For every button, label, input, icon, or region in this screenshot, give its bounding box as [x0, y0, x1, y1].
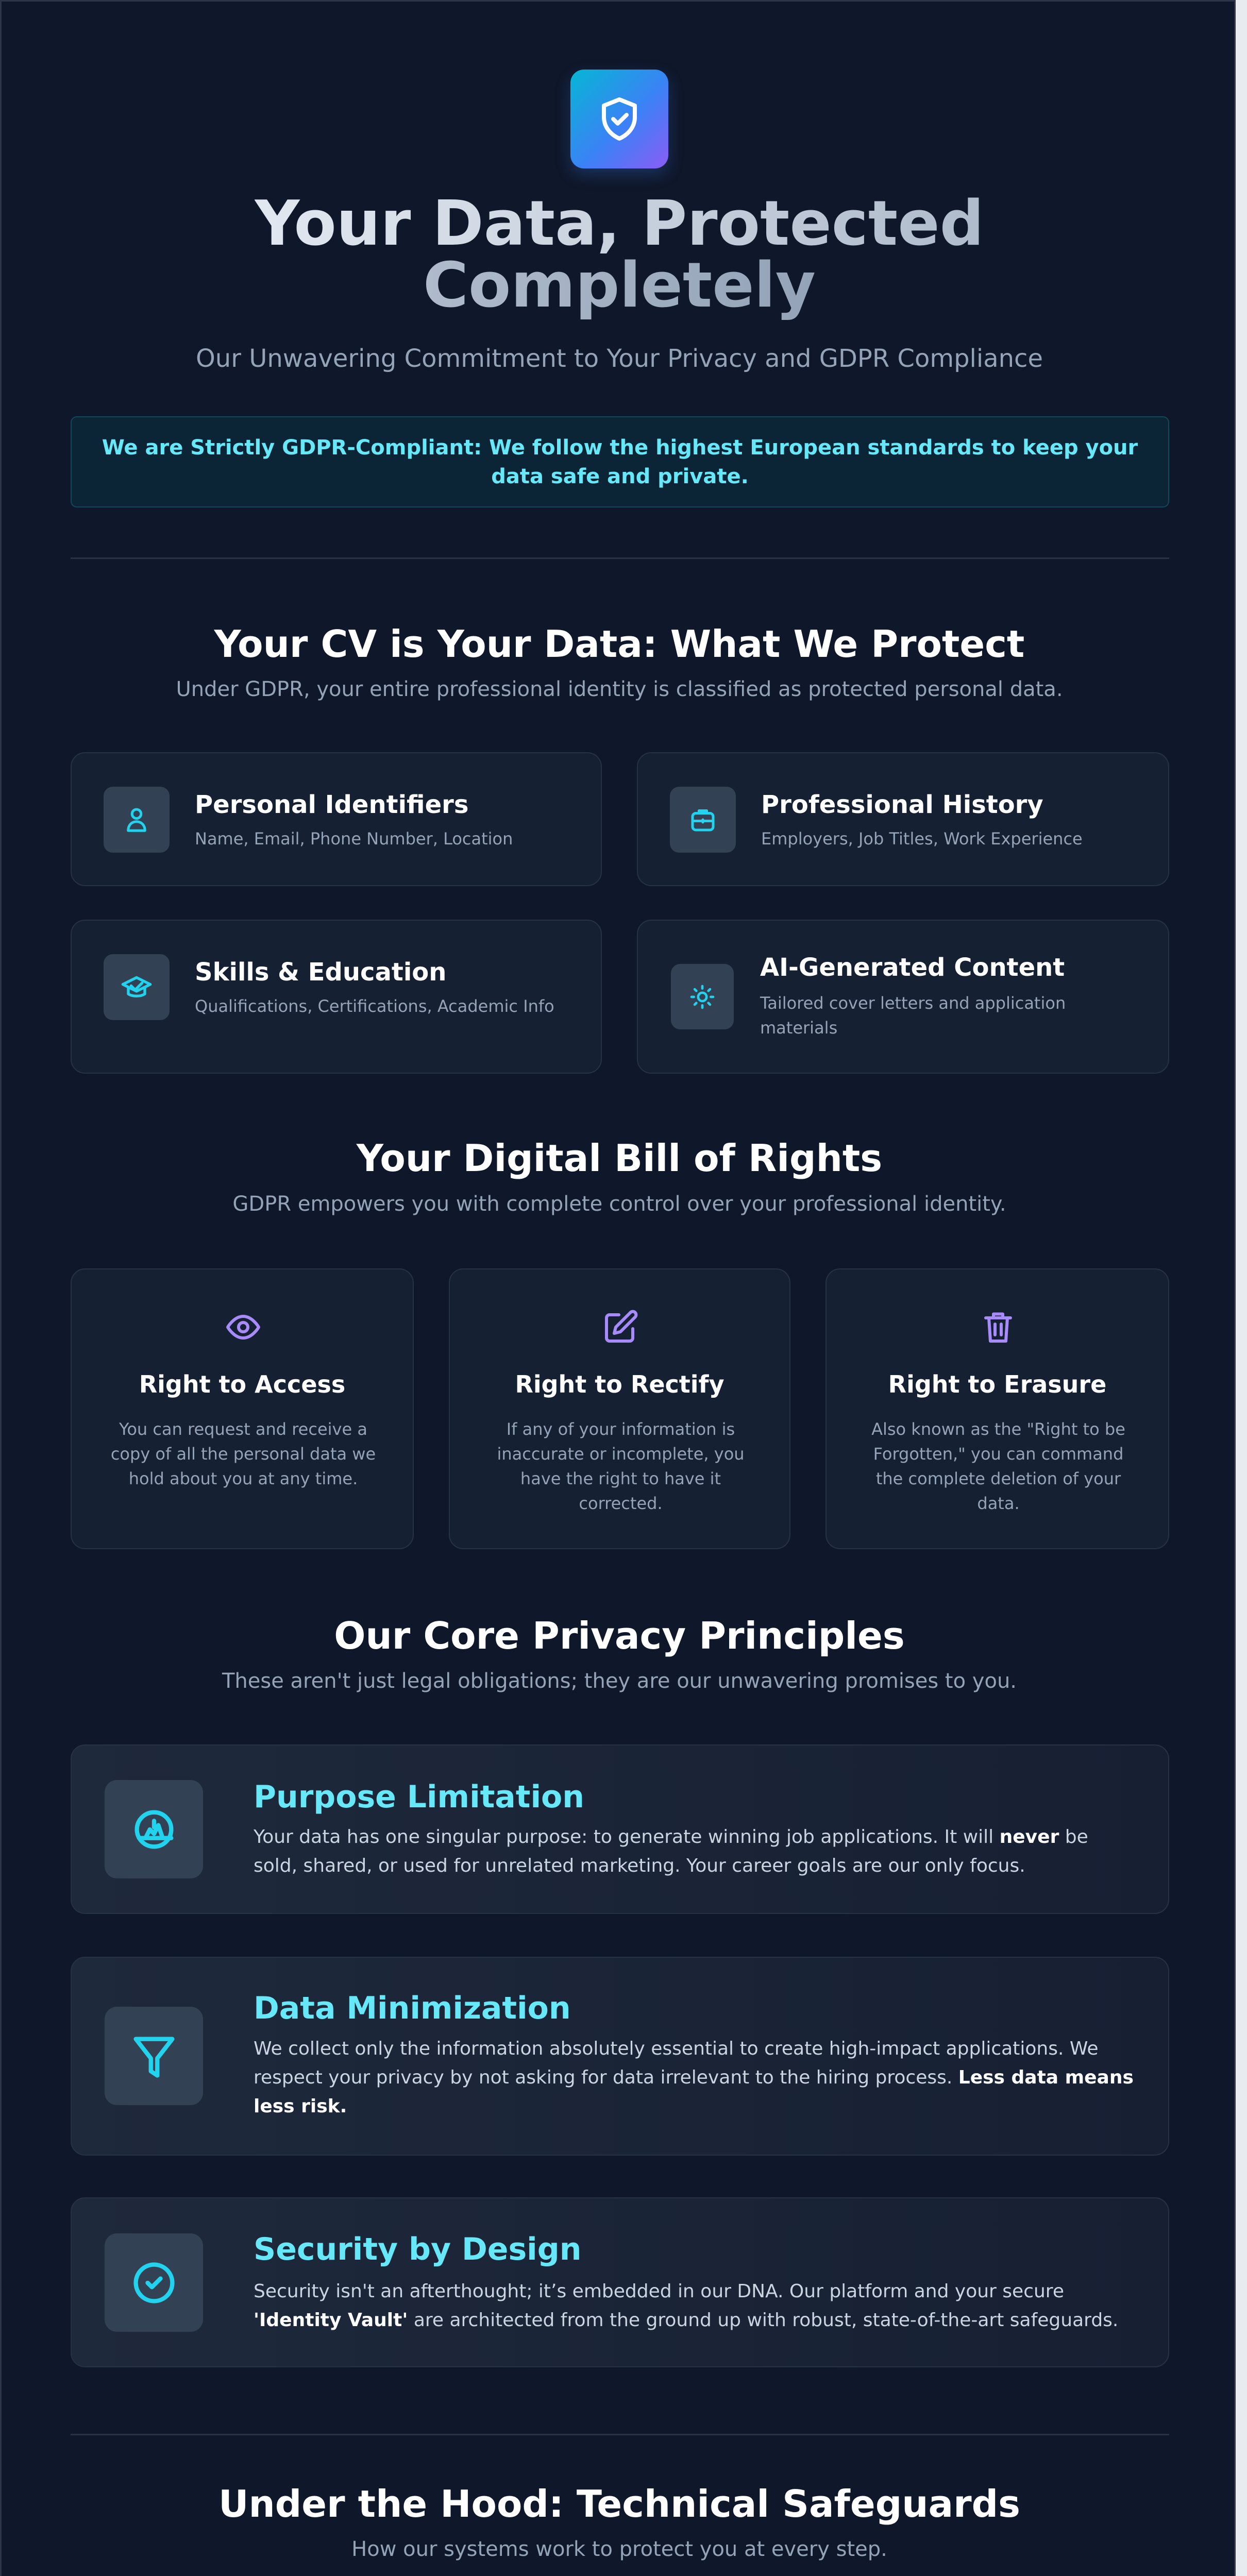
- heading: bill of rights: Your Digital Bill of Rights: [357, 1137, 882, 1180]
- panel: professional history: [637, 752, 1169, 886]
- heading: core privacy principles: Our Core Privacy Principles: [334, 1614, 905, 1657]
- panel: skills & education: [71, 920, 602, 1074]
- text: AI-generated content: AI-Generated Content: [760, 953, 1065, 982]
- panel: professional history: Employers, Job Titles, Work Experience: [761, 829, 1083, 849]
- text: safeguards subtitle: How our systems work to protect you at every step.: [351, 2537, 887, 2561]
- icon: briefcase: [670, 787, 736, 853]
- panel: data minimization: [71, 1957, 1169, 2156]
- subtitle: Our Unwavering Commitment to Your Privacy and GDPR Compliance: [196, 344, 1043, 373]
- panel: AI-generated content: [637, 920, 1169, 1074]
- icon: AI sparkle: [671, 964, 734, 1029]
- callout: GDPR banner: [71, 416, 1169, 507]
- panel: skills & education: Qualifications, Certifications, Academic Info: [195, 996, 554, 1016]
- text: data minimization: Data Minimization: [254, 1990, 571, 2026]
- panel: right to access: You can request and receive a copy of all the personal data we hold about you at any time.: [111, 1419, 376, 1488]
- text: bill of rights subtitle: GDPR empowers you with complete control over your professional identity.: [232, 1192, 1006, 1216]
- heading: technical safeguards: Under the Hood: Technical Safeguards: [218, 2482, 1020, 2526]
- text: principles subtitle: These aren't just legal obligations; they are our unwavering promises to you.: [222, 1669, 1017, 1693]
- panel: security by design: Security isn't an afterthought; it’s embedded in our DNA. Our platform and your secure 'Identity Vault' are architected from the ground up with robust, state-of-the-art safeguards.: [254, 2281, 1118, 2331]
- callout: GDPR banner: We are Strictly GDPR-Compliant: We follow the highest European standards to keep your data safe and private.: [102, 436, 1138, 488]
- icon: check circle: [105, 2233, 203, 2332]
- text: right to rectify: Right to Rectify: [515, 1370, 724, 1398]
- panel: right to erasure: [825, 1268, 1169, 1549]
- icon: target: [105, 1780, 203, 1878]
- panel: purpose limitation: [71, 1744, 1169, 1914]
- text: security by design: Security by Design: [254, 2231, 581, 2267]
- panel: right to rectify: If any of your information is inaccurate or incomplete, you have the right to have it corrected.: [497, 1419, 745, 1513]
- panel: right to access: [71, 1268, 414, 1549]
- heading: what we protect: Your CV is Your Data: What We Protect: [214, 622, 1024, 666]
- icon: pencil: [605, 1310, 638, 1343]
- icon: user: [104, 787, 170, 853]
- text: what we protect subtitle: Under GDPR, your entire professional identity is classified as protected personal data.: [176, 677, 1063, 701]
- text: purpose limitation: Purpose Limitation: [254, 1779, 584, 1815]
- panel: right to rectify: [449, 1268, 790, 1549]
- panel: data minimization: We collect only the information absolutely essential to create high-impact applications. We respect your privacy by not asking for data irrelevant to the hiring process. Less data means less risk.: [254, 2038, 1134, 2117]
- icon: graduation: [104, 954, 170, 1020]
- text: personal identifiers: Personal Identifiers: [195, 790, 468, 819]
- title: Completely: [423, 250, 816, 321]
- text: right to erasure: Right to Erasure: [888, 1370, 1106, 1398]
- panel: personal identifiers: [71, 752, 602, 886]
- text: professional history: Professional History: [761, 790, 1043, 819]
- icon: eye: [226, 1315, 260, 1340]
- panel: AI-generated content: Tailored cover letters and application materials: [760, 993, 1066, 1038]
- title: Your Data, Protected: [255, 188, 984, 260]
- icon: shield logo: [570, 70, 668, 168]
- panel: purpose limitation: Your data has one singular purpose: to generate winning job applications. It will never be sold, shared, or used for unrelated marketing. Your career goals are our only focus.: [254, 1826, 1088, 1876]
- panel: right to erasure: Also known as the "Right to be Forgotten," you can command the complete deletion of your data.: [871, 1419, 1125, 1513]
- panel: security by design: [71, 2197, 1169, 2367]
- icon: trash: [984, 1313, 1012, 1343]
- icon: funnel: [105, 2007, 203, 2105]
- title: [255, 188, 984, 321]
- panel: personal identifiers: Name, Email, Phone Number, Location: [195, 829, 513, 849]
- text: right to access: Right to Access: [139, 1370, 345, 1398]
- text: skills & education: Skills & Education: [195, 958, 446, 987]
